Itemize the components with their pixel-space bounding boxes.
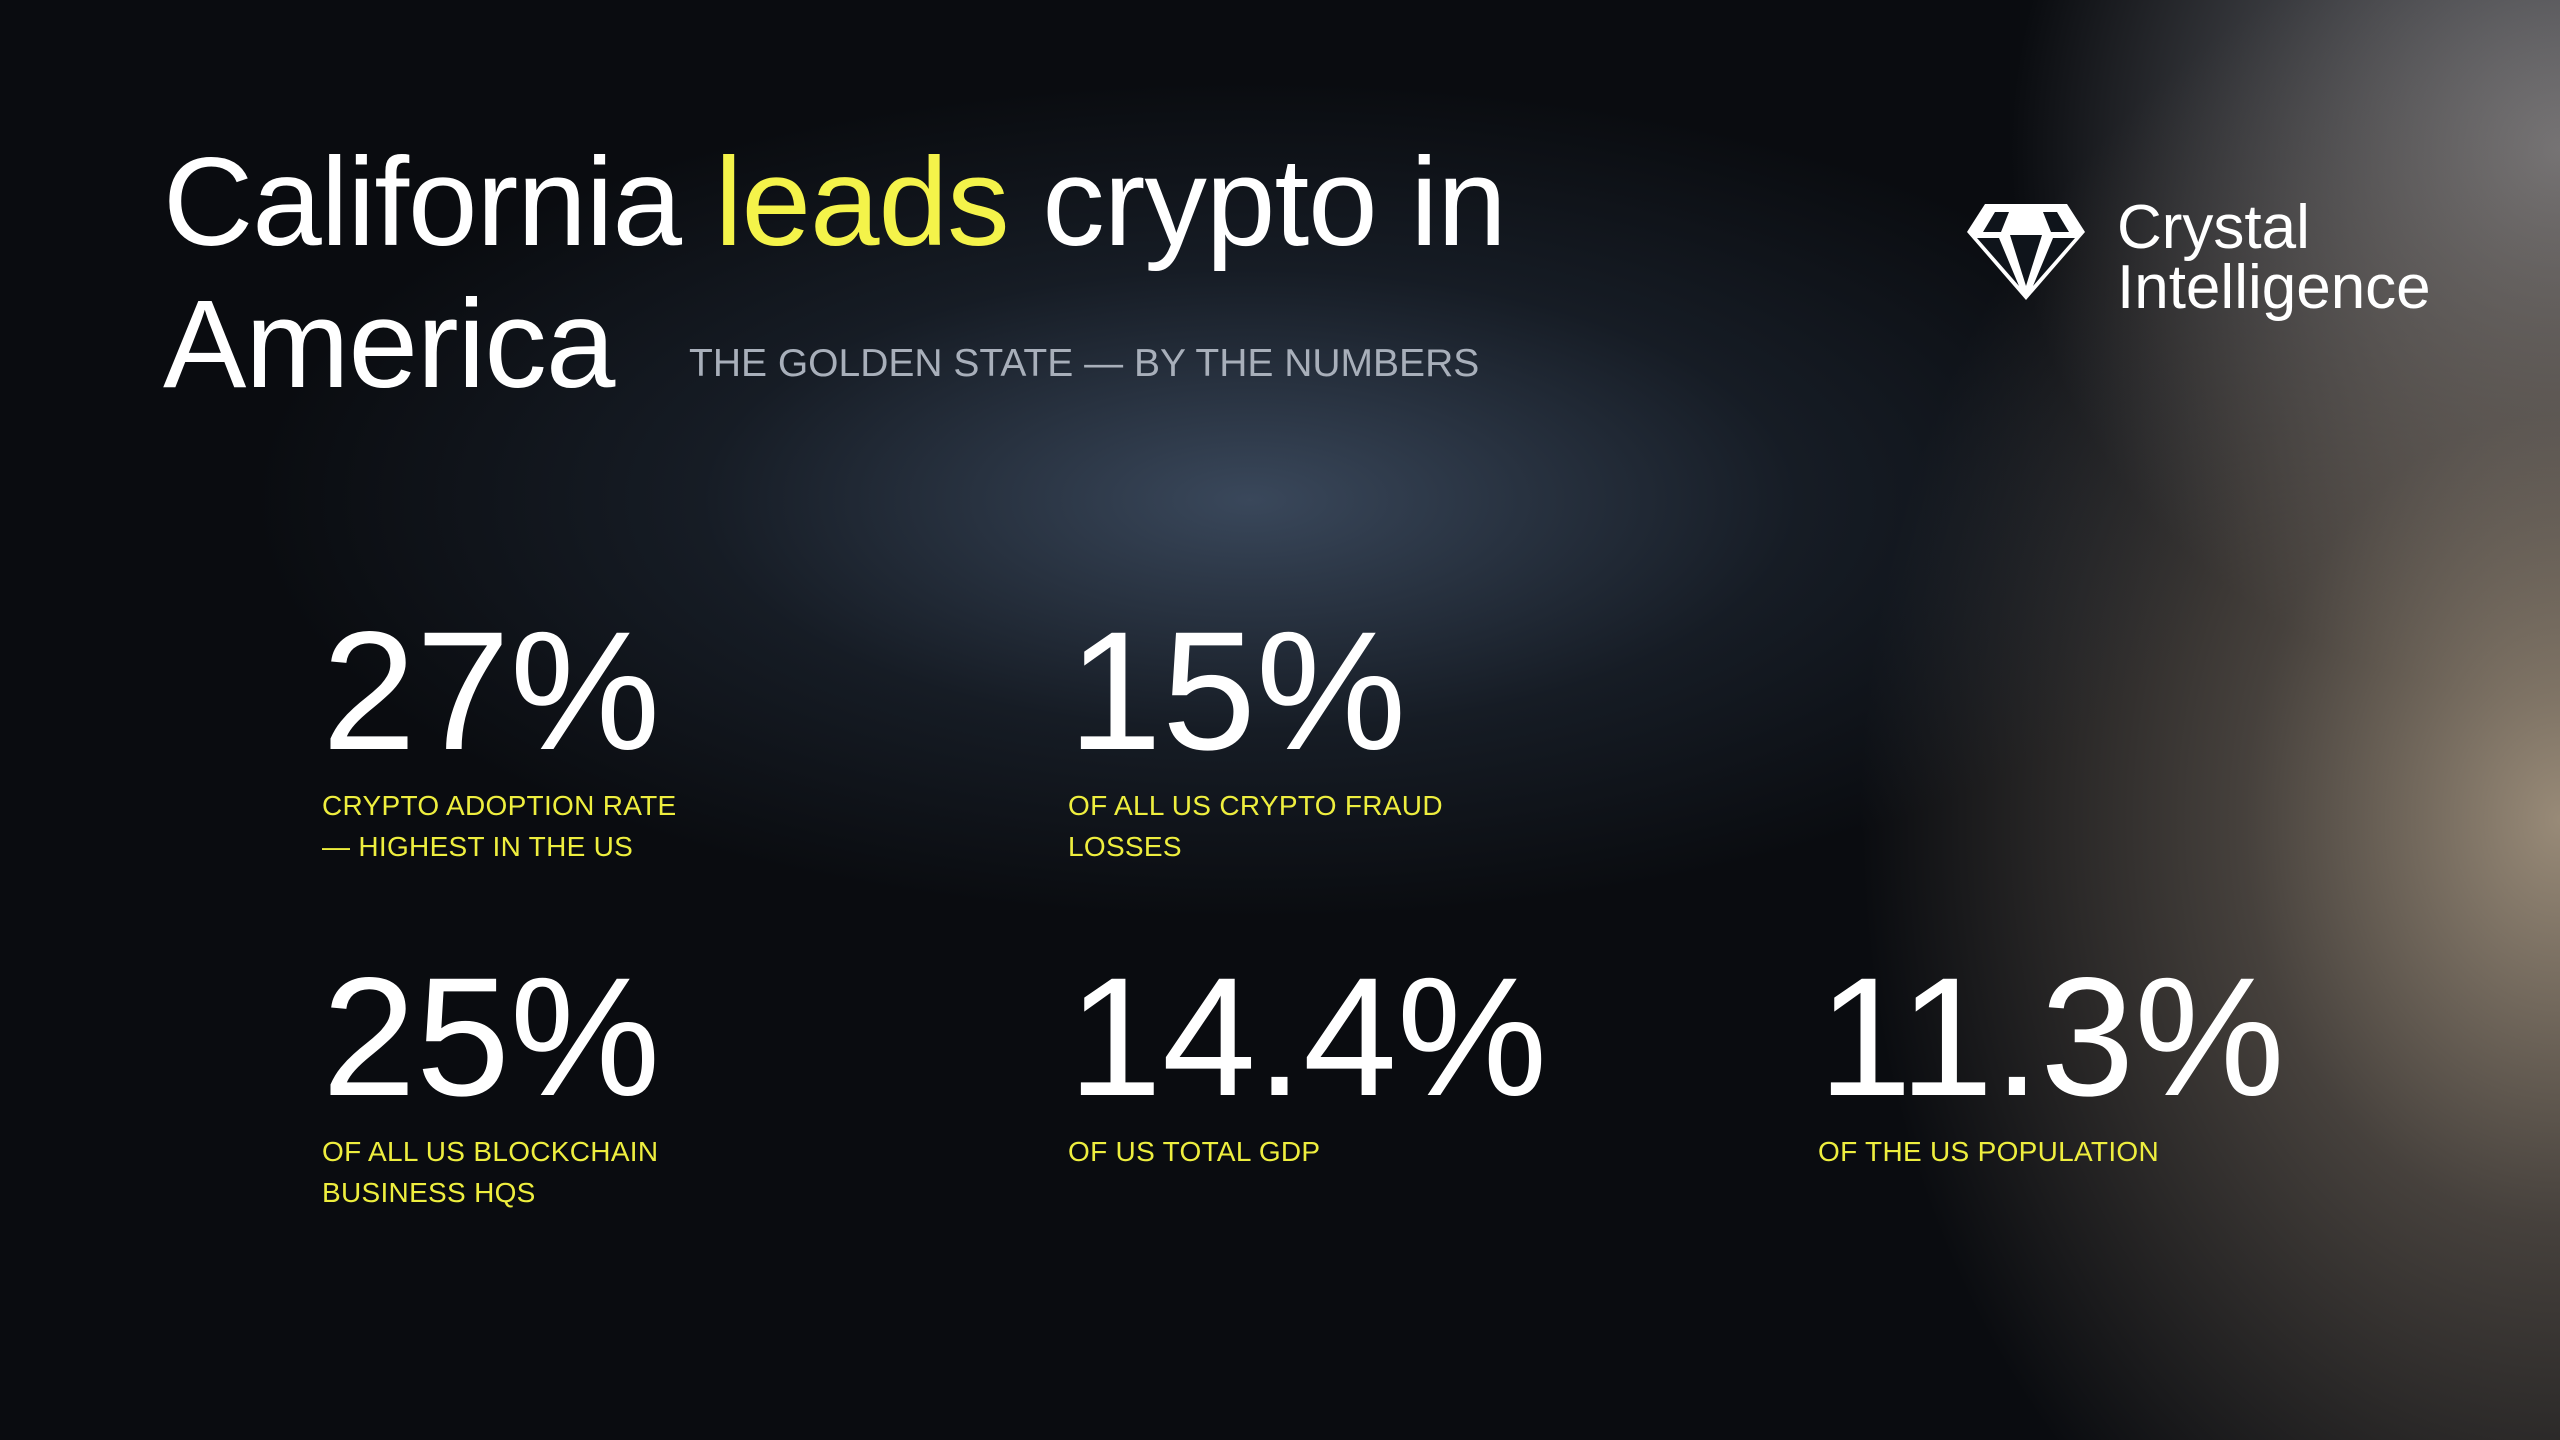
title bbox=[163, 133, 1506, 414]
stat: 27%: — HIGHEST IN THE US bbox=[322, 831, 633, 862]
stat: 15%: LOSSES bbox=[1068, 831, 1182, 862]
stat: 27%: CRYPTO ADOPTION RATE bbox=[322, 790, 677, 821]
stat: 27% bbox=[322, 596, 677, 862]
subtitle: THE GOLDEN STATE — BY THE NUMBERS bbox=[689, 342, 1479, 385]
logo text: Intelligence bbox=[2117, 253, 2431, 322]
stat: 15% bbox=[1068, 596, 1443, 862]
logo bbox=[1967, 193, 2431, 322]
stat: 14.4%: 14.4% bbox=[1068, 942, 1547, 1131]
stat: 25%: OF ALL US BLOCKCHAIN bbox=[322, 1136, 658, 1167]
stat: 14.4%: OF US TOTAL GDP bbox=[1068, 1136, 1320, 1167]
stat: 25%: 25% bbox=[322, 942, 660, 1131]
title: America bbox=[163, 275, 614, 414]
stat: 25%: BUSINESS HQS bbox=[322, 1177, 536, 1208]
stat: 15%: 15% bbox=[1068, 596, 1406, 785]
title: California leads crypto in bbox=[163, 133, 1506, 272]
icon: diamond bbox=[1967, 204, 2085, 300]
stat: 11.3%: 11.3% bbox=[1818, 942, 2285, 1131]
logo text bbox=[2117, 193, 2431, 322]
logo text: Crystal bbox=[2117, 193, 2310, 262]
stat: 15%: OF ALL US CRYPTO FRAUD bbox=[1068, 790, 1443, 821]
stat: 27%: 27% bbox=[322, 596, 660, 785]
stat: 11.3%: OF THE US POPULATION bbox=[1818, 1136, 2159, 1167]
